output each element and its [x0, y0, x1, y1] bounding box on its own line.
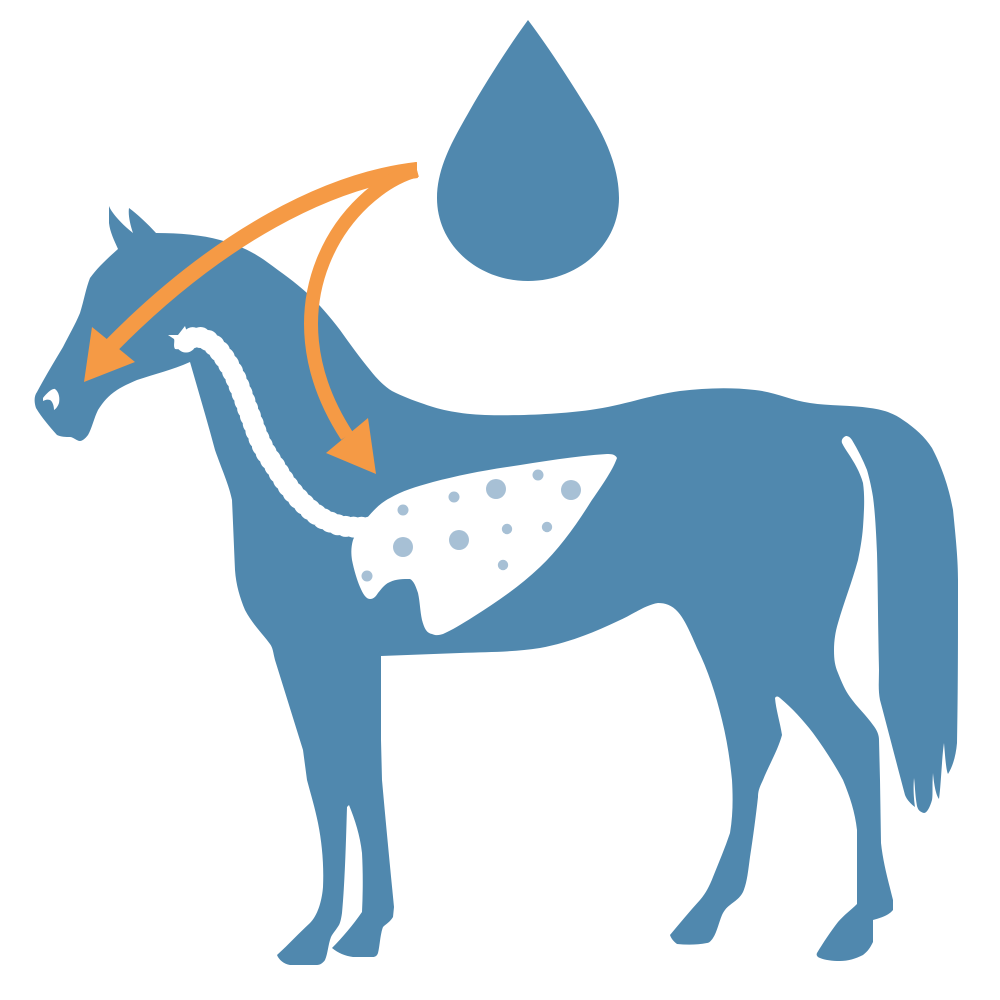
- trachea: [168, 326, 372, 527]
- horse silhouette: [35, 206, 958, 965]
- icon: nostril: [43, 389, 59, 410]
- arrow: water to nose: [84, 162, 417, 382]
- icon: water drop: [437, 20, 619, 281]
- arrowhead: lung: [326, 418, 376, 474]
- lung spots: [362, 470, 581, 582]
- lung: [351, 454, 617, 635]
- arrow: water to lung: [311, 170, 417, 474]
- larynx: [168, 326, 200, 349]
- arrowhead: nose: [84, 327, 135, 382]
